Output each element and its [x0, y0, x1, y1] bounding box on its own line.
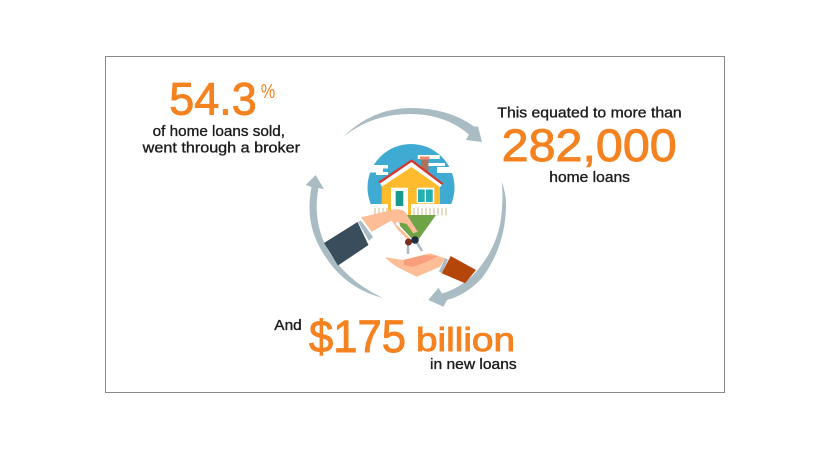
caption line 2: went through a broker: [142, 141, 300, 157]
right sleeve: [442, 256, 476, 283]
illustration: house and key handover: [324, 144, 476, 283]
keys: [405, 236, 422, 254]
arrow: left: [306, 175, 383, 298]
caption: home loans: [549, 170, 630, 186]
number: $175: $175: [309, 311, 406, 362]
lower hand: [385, 253, 445, 277]
panel: frame: [106, 56, 724, 392]
left sleeve: [324, 222, 368, 266]
stat: $175 billion in new loans: [274, 311, 517, 373]
key stems: [408, 240, 422, 254]
chimney cap: [420, 156, 430, 160]
lead-in text: This equated to more than: [497, 105, 682, 121]
house wall: [382, 164, 440, 216]
key fob: navy: [411, 236, 419, 244]
lower palm shading: [403, 255, 438, 267]
lead-in text: And: [274, 318, 302, 334]
sky circle: [368, 144, 454, 204]
chimney: [421, 160, 428, 172]
caption line 1: of home loans sold,: [153, 124, 285, 140]
grass: [398, 215, 436, 243]
door: [391, 188, 408, 216]
caption: in new loans: [430, 357, 517, 373]
arrow: right: [428, 182, 506, 307]
roof: [378, 159, 443, 185]
number: 282,000: 282,000: [502, 120, 677, 171]
key fob: red: [405, 238, 412, 246]
left cuff: [358, 220, 373, 241]
house scene: [368, 144, 454, 216]
stat: 54.3% of home loans sold: [142, 73, 300, 157]
arrow: top: [343, 108, 482, 142]
stat: 282,000 home loans: [497, 105, 682, 186]
infographic: [105, 56, 725, 393]
fence: [371, 204, 452, 216]
right cuff: [439, 258, 448, 273]
window: [417, 188, 434, 203]
clouds: [365, 155, 455, 175]
word: billion: billion: [416, 321, 515, 358]
cycle arrows: [306, 108, 506, 307]
percent sign: %: [261, 81, 275, 103]
upper hand: [361, 209, 418, 240]
number: 54.3: 54.3: [169, 73, 257, 124]
